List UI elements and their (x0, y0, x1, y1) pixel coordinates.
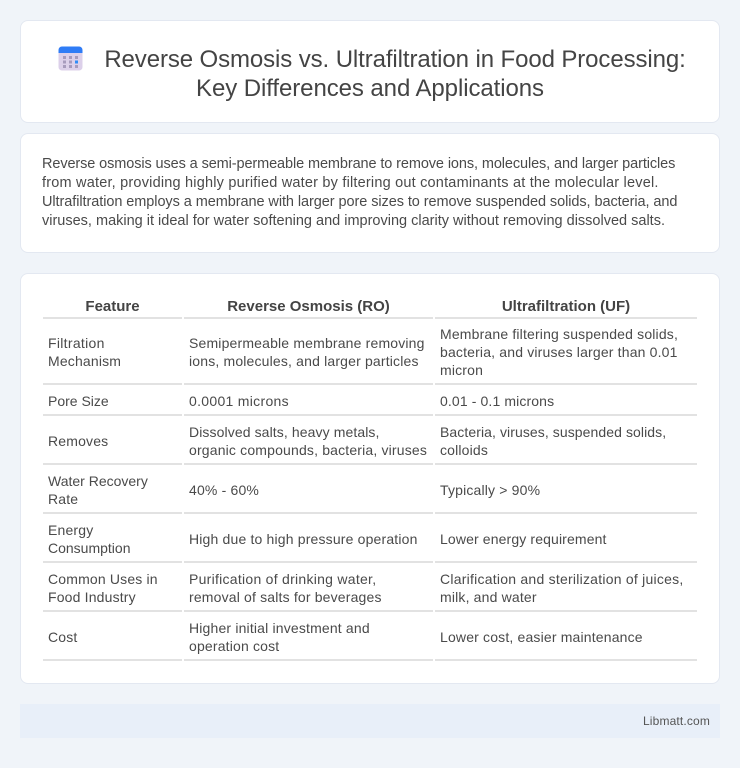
title (104, 46, 686, 102)
text block: introduction: Reverse osmosis uses a semi-permeable membrane to remove ions, molecules, and larger particles (42, 156, 675, 172)
panel: title card (20, 20, 720, 123)
row: water recovery rate: Rate (48, 491, 78, 507)
row: cost: Cost (48, 629, 77, 645)
row: cost: Higher initial investment and (189, 620, 370, 636)
row: removes (48, 424, 666, 458)
row: pore size: 0.01 - 0.1 microns (440, 393, 554, 409)
table header: Ultrafiltration (UF) (502, 298, 630, 315)
text block: introduction: from water, providing highly purified water by filtering out contaminants at the molecular level. (42, 175, 659, 191)
row: filtration mechanism: Membrane filtering suspended solids, (440, 326, 678, 342)
row: water recovery rate (48, 473, 540, 507)
footer bar (20, 704, 720, 738)
table header (85, 298, 630, 315)
row: filtration mechanism: micron (440, 362, 483, 378)
row: pore size (48, 393, 554, 409)
text block: introduction (42, 156, 677, 229)
row: filtration mechanism: ions, molecules, and larger particles (189, 353, 419, 369)
row: removes: colloids (440, 442, 488, 458)
row: cost: Lower cost, easier maintenance (440, 629, 643, 645)
footer text: Libmatt.com (643, 714, 710, 728)
row: removes: Bacteria, viruses, suspended solids, (440, 424, 666, 440)
panel: comparison table (20, 273, 720, 684)
row: energy consumption: Consumption (48, 540, 130, 556)
row: water recovery rate: Typically > 90% (440, 482, 540, 498)
row: filtration mechanism: Mechanism (48, 353, 121, 369)
row: cost: operation cost (189, 638, 279, 654)
table header: Reverse Osmosis (RO) (227, 298, 390, 315)
icon: calendar (58, 46, 82, 70)
row: energy consumption (48, 522, 607, 556)
row: removes: Removes (48, 433, 108, 449)
row: energy consumption: Lower energy requirement (440, 531, 607, 547)
table header: Feature (85, 298, 140, 315)
row: common uses: Purification of drinking water, (189, 571, 376, 587)
row: pore size: 0.0001 microns (189, 393, 289, 409)
row: common uses: Common Uses in (48, 571, 158, 587)
row: filtration mechanism: bacteria, and viruses larger than 0.01 (440, 344, 678, 360)
row: energy consumption: Energy (48, 522, 93, 538)
row: cost (48, 620, 643, 654)
row: removes: Dissolved salts, heavy metals, (189, 424, 380, 440)
row: energy consumption: High due to high pressure operation (189, 531, 418, 547)
row: filtration mechanism: Filtration (48, 335, 105, 351)
row: filtration mechanism (48, 326, 678, 378)
panel: introduction (20, 133, 720, 253)
text block: introduction: viruses, making it ideal for water softening and improving clarity without removing dissolved salts. (42, 213, 665, 229)
row: common uses: Food Industry (48, 589, 136, 605)
text block: introduction: Ultrafiltration employs a membrane with larger pore sizes to remove suspended solids, bacteria, and (42, 194, 677, 210)
row: common uses: Clarification and sterilization of juices, (440, 571, 684, 587)
row: common uses (48, 571, 684, 605)
row: common uses: milk, and water (440, 589, 537, 605)
row: common uses: removal of salts for beverages (189, 589, 382, 605)
row: removes: organic compounds, bacteria, viruses (189, 442, 427, 458)
row: water recovery rate: Water Recovery (48, 473, 148, 489)
title: Reverse Osmosis vs. Ultrafiltration in Food Processing: (104, 46, 686, 73)
row: water recovery rate: 40% - 60% (189, 482, 259, 498)
title: Key Differences and Applications (196, 75, 544, 102)
row: filtration mechanism: Semipermeable membrane removing (189, 335, 425, 351)
row: pore size: Pore Size (48, 393, 109, 409)
